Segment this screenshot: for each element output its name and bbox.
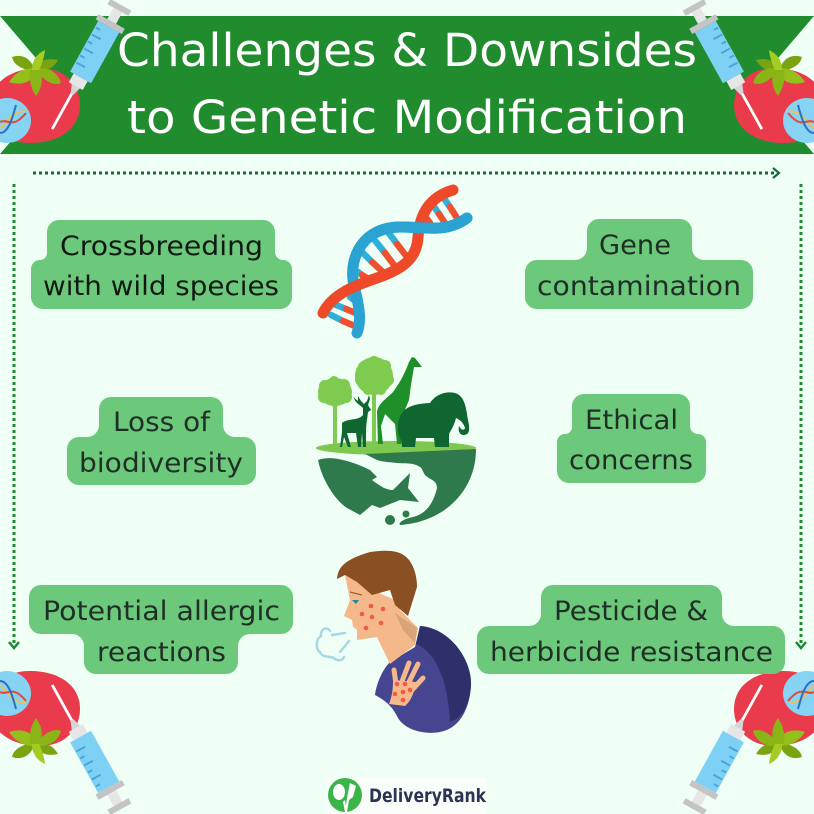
deer — [340, 395, 371, 447]
panel: gene contamination: Gene — [599, 230, 671, 261]
panel: potential allergic reactions: Potential allergic — [43, 596, 280, 627]
panel: ethical concerns: concerns — [569, 445, 693, 476]
shirt — [375, 626, 471, 733]
panel: crossbreeding with wild species — [31, 220, 292, 309]
arrow: left dotted — [9, 184, 19, 648]
rash dots — [360, 604, 412, 702]
panel: pesticide and herbicide resistance — [477, 585, 785, 674]
icon: biodiversity globe — [316, 356, 476, 525]
arrow: right dotted — [796, 184, 806, 648]
breath cloud — [317, 629, 349, 660]
title banner — [0, 16, 814, 154]
panel: gene contamination: contamination — [537, 271, 741, 302]
icon: person with allergic reaction — [317, 551, 471, 733]
logo: DeliveryRank — [328, 778, 487, 814]
panel: gene contamination — [525, 219, 753, 309]
title: Challenges & Downsides — [117, 24, 697, 77]
hemisphere — [365, 449, 476, 525]
icon: fork and spoon — [328, 778, 362, 812]
giraffe — [377, 357, 422, 444]
panel: loss of biodiversity: Loss of — [113, 407, 212, 438]
arrow: top dotted — [33, 168, 779, 178]
panel: potential allergic reactions — [29, 585, 293, 674]
hair — [337, 551, 417, 616]
elephant — [398, 392, 469, 447]
panel: crossbreeding with wild species: Crossbreeding — [60, 231, 263, 262]
icon: tomato and syringe top left — [0, 0, 134, 143]
icon: tomato and syringe top right — [680, 0, 814, 143]
icon: DNA helix — [323, 190, 467, 333]
logo: DeliveryRank: DeliveryRank — [369, 785, 486, 807]
ground — [316, 441, 476, 455]
panel: pesticide and herbicide resistance: Pesticide & — [554, 596, 708, 627]
panel: loss of biodiversity — [67, 397, 256, 485]
panel: pesticide and herbicide resistance: herbicide resistance — [490, 637, 773, 668]
icon: tomato and syringe bottom right — [680, 671, 814, 814]
whale — [318, 458, 419, 515]
trees — [318, 356, 394, 444]
panel: loss of biodiversity: biodiversity — [79, 448, 243, 479]
panel: crossbreeding with wild species: with wild species — [43, 271, 279, 302]
title — [117, 24, 697, 144]
eye — [352, 600, 359, 604]
title: to Genetic Modification — [127, 91, 687, 144]
hand — [389, 663, 423, 706]
skin — [344, 575, 418, 664]
panel: potential allergic reactions: reactions — [97, 637, 226, 668]
panel: ethical concerns — [557, 394, 706, 483]
icon: tomato and syringe bottom left — [0, 671, 134, 814]
panel: ethical concerns: Ethical — [585, 405, 678, 436]
